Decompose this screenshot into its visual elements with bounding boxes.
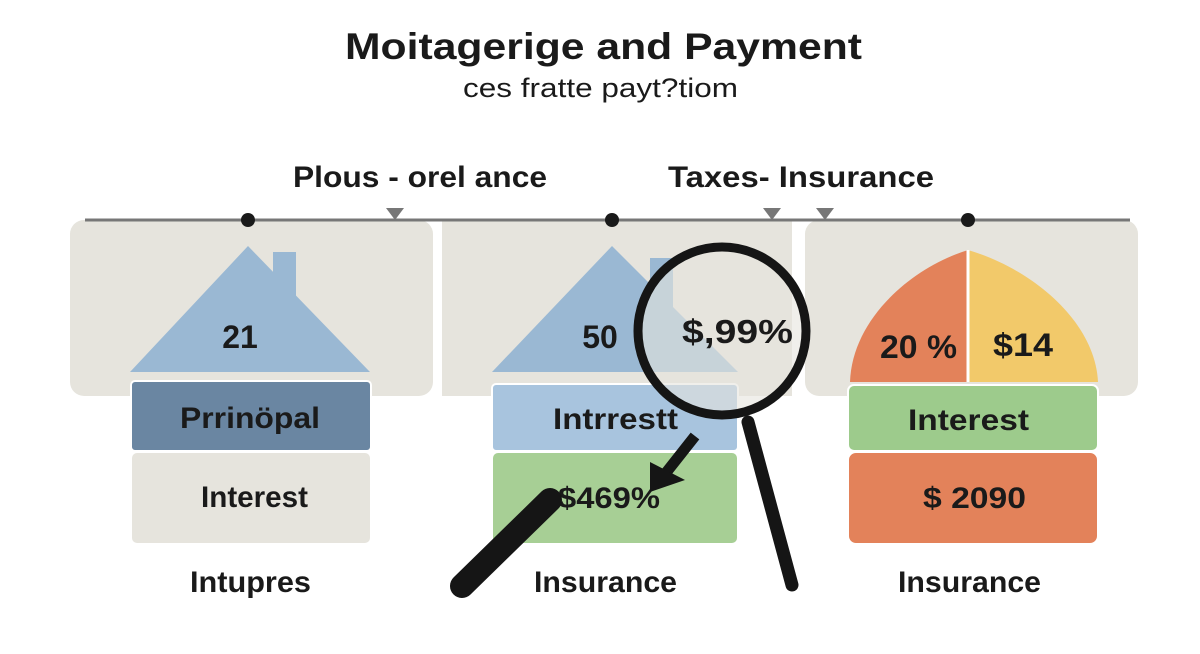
- panel: backgrounds: [70, 220, 1138, 396]
- panel: interest house: 50: [582, 319, 618, 355]
- panel: taxes insurance: [848, 250, 1098, 544]
- panel: principal house: 21: [222, 319, 258, 355]
- panel: taxes insurance: $ 2090: [923, 482, 1026, 515]
- heading: left: Plous - orel ance: [293, 161, 547, 194]
- panel: interest house: [492, 246, 738, 544]
- subtitle: ces fratte payt?tiom: [463, 73, 738, 103]
- title: Moitagerige and Payment: [345, 26, 862, 67]
- panel: principal house: Interest: [201, 481, 308, 514]
- label: insurance right: Insurance: [898, 566, 1041, 599]
- icon: magnifier: $,99%: [682, 313, 793, 350]
- panel: taxes insurance: Interest: [908, 404, 1029, 437]
- panel: interest house: $469%: [558, 482, 660, 515]
- heading: right: Taxes- Insurance: [668, 161, 934, 194]
- label: insurance middle: Insurance: [534, 566, 677, 599]
- panel: interest house: Intrrestt: [553, 403, 678, 436]
- panel: principal house: [130, 246, 371, 544]
- arrow: [650, 436, 695, 492]
- icon: magnifier: [638, 247, 806, 585]
- panel: taxes insurance: $14: [993, 327, 1053, 363]
- icon: stick: [462, 500, 550, 586]
- timeline: [85, 208, 1130, 227]
- label: intupres: Intupres: [190, 566, 311, 599]
- panel: taxes insurance: 20 %: [880, 329, 957, 365]
- panel: principal house: Prrinöpal: [180, 402, 320, 435]
